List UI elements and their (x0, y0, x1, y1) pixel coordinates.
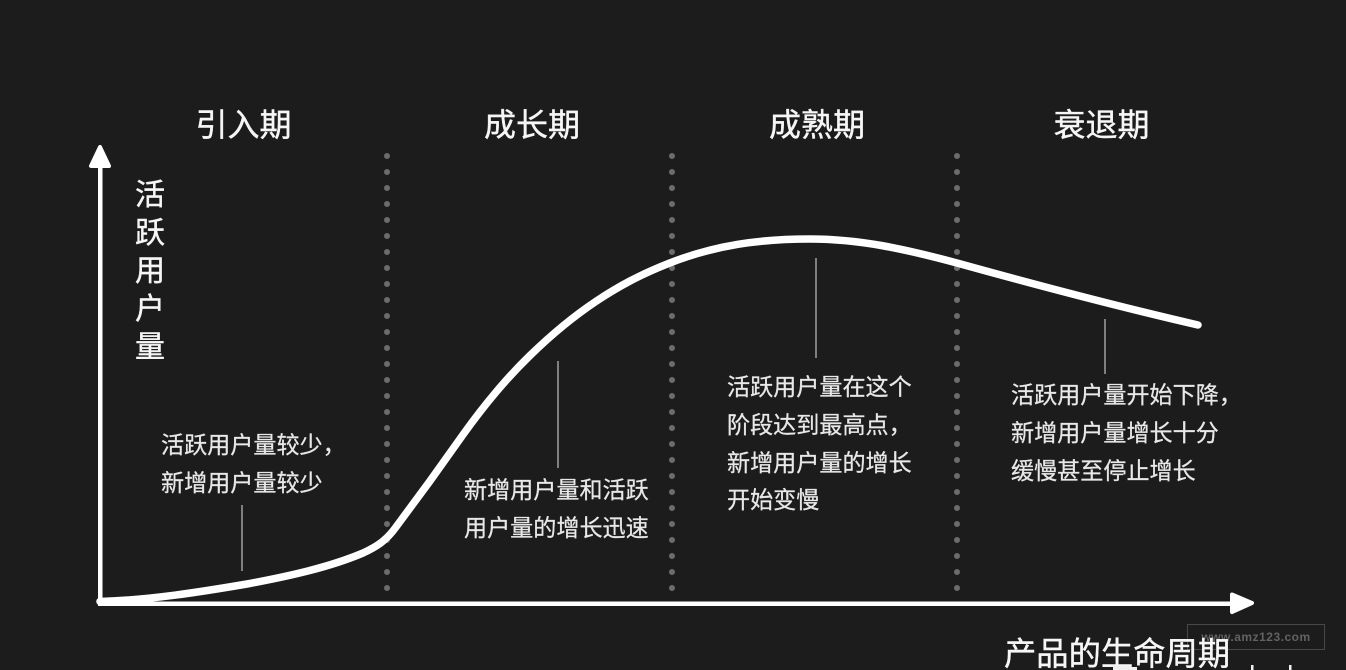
callout: decline stage: 新增用户量增长十分 (1011, 420, 1219, 446)
heading: introduction stage: 引入期 (196, 107, 292, 143)
watermark (1187, 624, 1325, 650)
callout: maturity stage: 新增用户量的增长 (727, 450, 912, 476)
callout: introduction stage (161, 432, 346, 496)
stage dividers (387, 156, 957, 590)
callout leader lines (242, 258, 1105, 571)
callout: decline stage: 活跃用户量开始下降， (1011, 382, 1242, 408)
callout: introduction stage: 新增用户量较少 (161, 470, 323, 496)
watermark: www.amz123.com (1201, 630, 1311, 644)
callout: maturity stage (727, 374, 912, 513)
callout: growth stage (464, 477, 649, 541)
callout: growth stage: 新增用户量和活跃 (464, 477, 649, 503)
callout: maturity stage: 开始变慢 (727, 487, 819, 513)
callout: decline stage: 缓慢甚至停止增长 (1011, 458, 1196, 484)
heading: growth stage: 成长期 (484, 107, 580, 143)
callout: maturity stage: 活跃用户量在这个 (727, 374, 912, 400)
heading: decline stage: 衰退期 (1054, 107, 1150, 143)
y axis label: 量 (135, 331, 165, 364)
lifecycle curve (100, 239, 1198, 602)
y axis label: 跃 (135, 217, 165, 250)
callout: growth stage: 用户量的增长迅速 (464, 515, 649, 541)
y axis label: 用 (135, 255, 165, 288)
callout: introduction stage: 活跃用户量较少， (161, 432, 346, 458)
y axis label: 户 (135, 293, 165, 326)
x axis arrow (98, 594, 1252, 612)
y axis label: 活 (135, 179, 165, 212)
clipped fragments of text below the canvas edge (1113, 665, 1292, 670)
y axis label (135, 179, 165, 364)
callout: maturity stage: 阶段达到最高点， (727, 412, 912, 438)
callout: decline stage (1011, 382, 1242, 484)
y axis arrow (91, 147, 109, 603)
heading: maturity stage: 成熟期 (769, 107, 865, 143)
